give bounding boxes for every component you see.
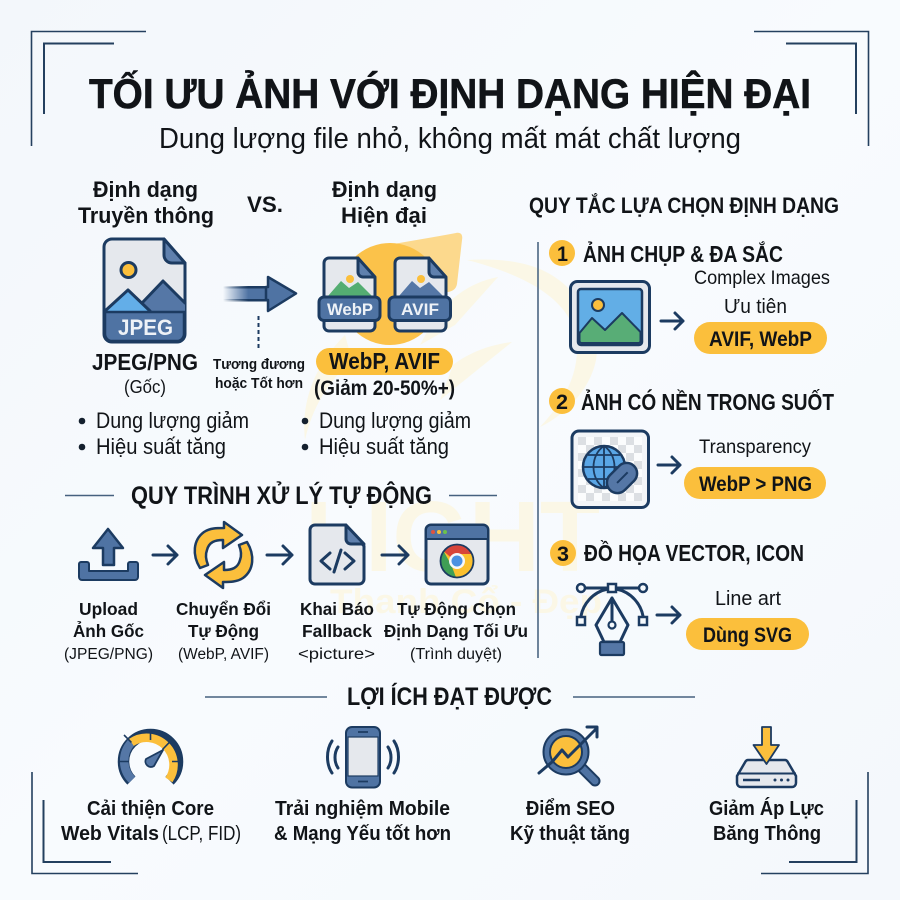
benefit labels [61,797,824,845]
heading: traditional formats: Định dạng [93,177,198,202]
pill: WebP > PNG: WebP > PNG [699,473,812,496]
rule 2 [549,387,834,508]
heading: traditional formats [78,177,214,228]
icon: SEO magnifier [539,727,597,781]
panel: automated process [64,480,528,663]
bullets: right: Hiệu suất tăng [319,434,449,459]
icon: JPEG file: JPEG [118,315,173,340]
arrow [658,457,680,473]
benefit labels: Cải thiện Core [87,798,214,820]
icon: upload [79,529,138,580]
pill: AVIF, WebP [694,322,827,354]
icon: gauge [118,729,183,781]
pill: WebP > PNG [684,467,826,499]
bullets: left [79,408,249,459]
rule 3: Line art [715,588,781,610]
vs label: VS. [247,192,283,217]
step labels: Tự Động Chọn [397,599,516,619]
arrow [657,607,680,623]
icon: code file [310,525,364,584]
label: equal or better: hoặc Tốt hơn [215,376,303,392]
heading: modern formats: Định dạng [332,177,437,202]
label: original: (Gốc) [124,377,166,397]
rule 1: Ưu tiên [724,296,787,318]
pill: WebP, AVIF: WebP, AVIF [329,348,440,374]
watermark [304,260,602,621]
step labels: Upload [79,599,138,619]
bullets: left: Hiệu suất tăng [96,434,226,459]
heading: benefits: LỢI ÍCH ĐẠT ĐƯỢC [347,682,552,711]
icon: bandwidth drive [737,727,796,787]
rule 2: 2 [556,391,568,414]
label: equal or better: Tương đương [213,357,305,373]
benefit labels: Kỹ thuật tăng [510,823,630,845]
icon: JPEG file [104,239,185,342]
icon: WebP file [319,258,380,331]
icon: AVIF file [389,258,450,331]
step labels: Khai Báo [300,599,374,619]
icon: photo [570,282,650,352]
yellow highlight blob [339,233,462,345]
rule 1: ẢNH CHỤP & ĐA SẮC [583,239,783,267]
rule 3: ĐỒ HỌA VECTOR, ICON [584,539,804,566]
rule 1 [549,239,830,354]
arrow: conversion [223,277,296,311]
bullets: left: Dung lượng giảm [96,408,249,433]
heading: modern formats [332,177,437,228]
bullets: right [302,408,471,459]
icon: WebP file: WebP [327,300,373,319]
step labels: (Trình duyệt) [410,646,502,663]
arrow: step 1 to 2 [153,546,177,564]
pill: Dùng SVG [686,618,809,650]
panel: format comparison [78,177,471,459]
pill: Dùng SVG: Dùng SVG [703,624,792,647]
step labels: Ảnh Gốc [73,620,144,641]
benefit labels: Web Vitals [61,823,159,845]
heading: process: QUY TRÌNH XỬ LÝ TỰ ĐỘNG [131,480,432,510]
rule 3: 3 [557,543,569,566]
dashed connector [258,316,260,350]
title: TỐI ƯU ẢNH VỚI ĐỊNH DẠNG HIỆN ĐẠI [89,69,811,117]
label: JPEG/PNG: JPEG/PNG [92,349,198,375]
bullets: right: Dung lượng giảm [319,408,471,433]
icon: browser [426,525,488,584]
benefit labels: Trải nghiệm Mobile [275,798,450,820]
step labels: <picture> [298,646,375,663]
heading: rules: QUY TẮC LỰA CHỌN ĐỊNH DẠNG [529,193,839,218]
icon: transparency [572,431,648,508]
arrow [661,313,683,329]
step labels: (WebP, AVIF) [178,646,269,663]
icon: pen tool [577,584,647,655]
step labels: Chuyển Đổi [176,599,271,619]
subtitle: Dung lượng file nhỏ, không mất mát chất lượng [159,123,741,155]
step labels [64,599,528,663]
step labels: Fallback [302,621,372,641]
rule 2: Transparency [699,436,811,458]
watermark: Thanh Cổ - Đẹp [330,583,602,621]
arrow: step 3 to 4 [382,546,408,564]
panel: format rules [529,193,839,655]
heading: modern formats: Hiện đại [341,203,427,228]
benefit labels: Giảm Áp Lực [709,797,824,820]
benefit labels: (LCP, FID) [162,823,241,845]
watermark: LIGHT [305,481,600,593]
rule 1: Complex Images [694,267,830,289]
rule 2: ẢNH CÓ NỀN TRONG SUỐT [581,387,834,415]
rule 1: 1 [557,243,568,266]
benefit labels: Điểm SEO [526,798,615,820]
rule 3 [550,539,809,655]
heading: traditional formats: Truyền thông [78,203,214,228]
step labels: (JPEG/PNG) [64,646,153,663]
label: reduction: (Giảm 20-50%+) [314,377,455,400]
step labels: Tự Động [188,621,259,641]
label: equal or better [213,357,305,392]
panel: benefits [61,682,824,845]
icon: sync arrows [195,522,252,588]
benefit labels: & Mạng Yếu tốt hơn [274,823,451,845]
icon: phone [328,727,398,788]
icon: AVIF file: AVIF [401,300,439,319]
benefit labels: Băng Thông [713,823,821,845]
step labels: Định Dạng Tối Ưu [384,621,528,641]
arrow: step 2 to 3 [267,546,292,564]
pill: AVIF, WebP: AVIF, WebP [709,328,812,351]
